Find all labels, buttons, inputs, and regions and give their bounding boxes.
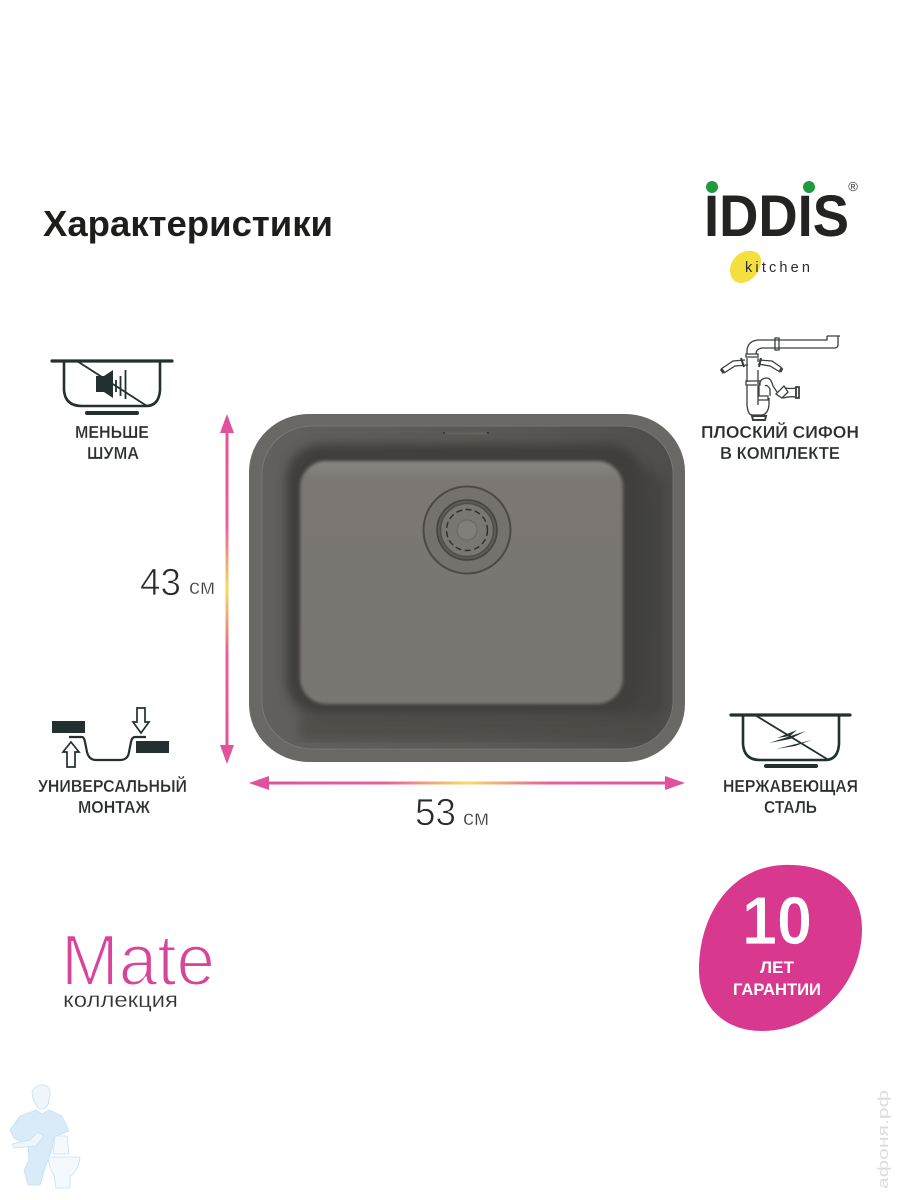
- label: less noise: [75, 422, 149, 463]
- sink drain: [424, 486, 510, 574]
- label: less noise: ШУМА: [87, 443, 139, 463]
- label: stainless steel: НЕРЖАВЕЮЩАЯ: [723, 776, 858, 796]
- Mate: Mate: [61, 921, 215, 1001]
- label: less noise: МЕНЬШЕ: [75, 422, 149, 442]
- label: universal mounting: УНИВЕРСАЛЬНЫЙ: [38, 775, 187, 796]
- dimension: 53 cm: 53: [415, 792, 456, 834]
- logo green dots: [706, 181, 815, 193]
- arrow: height: [220, 414, 234, 764]
- label: flat siphon: ПЛОСКИЙ СИФОН: [701, 421, 859, 442]
- badge years: ЛЕТ: [760, 958, 795, 977]
- logo kitchen word: kitchen: [745, 260, 810, 276]
- label: flat siphon: [701, 421, 859, 463]
- dimension: 43 cm: [140, 562, 215, 604]
- plumber head: [32, 1085, 50, 1109]
- sink basin floor: [300, 461, 623, 704]
- icon: stainless steel: [731, 715, 850, 766]
- plumber wrench: [12, 1132, 44, 1148]
- dimension: 43 cm: см: [189, 576, 215, 599]
- dimension: 53 cm: см: [463, 807, 489, 830]
- collection name: [61, 921, 215, 1012]
- badge blob: [699, 865, 862, 1031]
- watermark: site name: афоня.рф: [875, 1090, 892, 1189]
- logo: IDDIS kitchen: [704, 179, 858, 283]
- dimension: 53 cm: [415, 792, 489, 834]
- label: stainless steel: [723, 776, 858, 817]
- label: flat siphon: В КОМПЛЕКТЕ: [720, 443, 840, 463]
- badge warranty: ГАРАНТИИ: [733, 980, 821, 999]
- toilet bowl: [48, 1157, 80, 1188]
- title: Характеристики: [43, 203, 333, 244]
- badge number: 10: [742, 883, 812, 959]
- sink: [249, 414, 685, 762]
- plumber body: [10, 1110, 69, 1185]
- sink rim highlight: [262, 426, 673, 749]
- sink dark inner shadow: [286, 444, 664, 740]
- dimension: 43 cm: 43: [140, 562, 181, 604]
- label: stainless steel: СТАЛЬ: [764, 797, 817, 817]
- sink overflow slot: [443, 432, 489, 434]
- sink rim and walls: [262, 426, 673, 749]
- icon: less noise sink: [52, 361, 172, 413]
- warranty badge: [699, 865, 862, 1031]
- label: universal mounting: [38, 775, 187, 817]
- icon: universal mounting: [52, 708, 169, 767]
- logo yellow blob: [730, 251, 761, 283]
- arrow: width: [249, 776, 685, 790]
- sink outer body: [249, 414, 685, 762]
- collection label: коллекция: [63, 989, 178, 1012]
- watermark: plumber: [10, 1085, 80, 1188]
- logo wordmark: IDDIS: [704, 184, 849, 249]
- icon: flat siphon: [721, 336, 840, 420]
- logo registered mark: ®: [848, 179, 858, 194]
- label: universal mounting: МОНТАЖ: [78, 797, 150, 817]
- toilet tank: [53, 1136, 69, 1154]
